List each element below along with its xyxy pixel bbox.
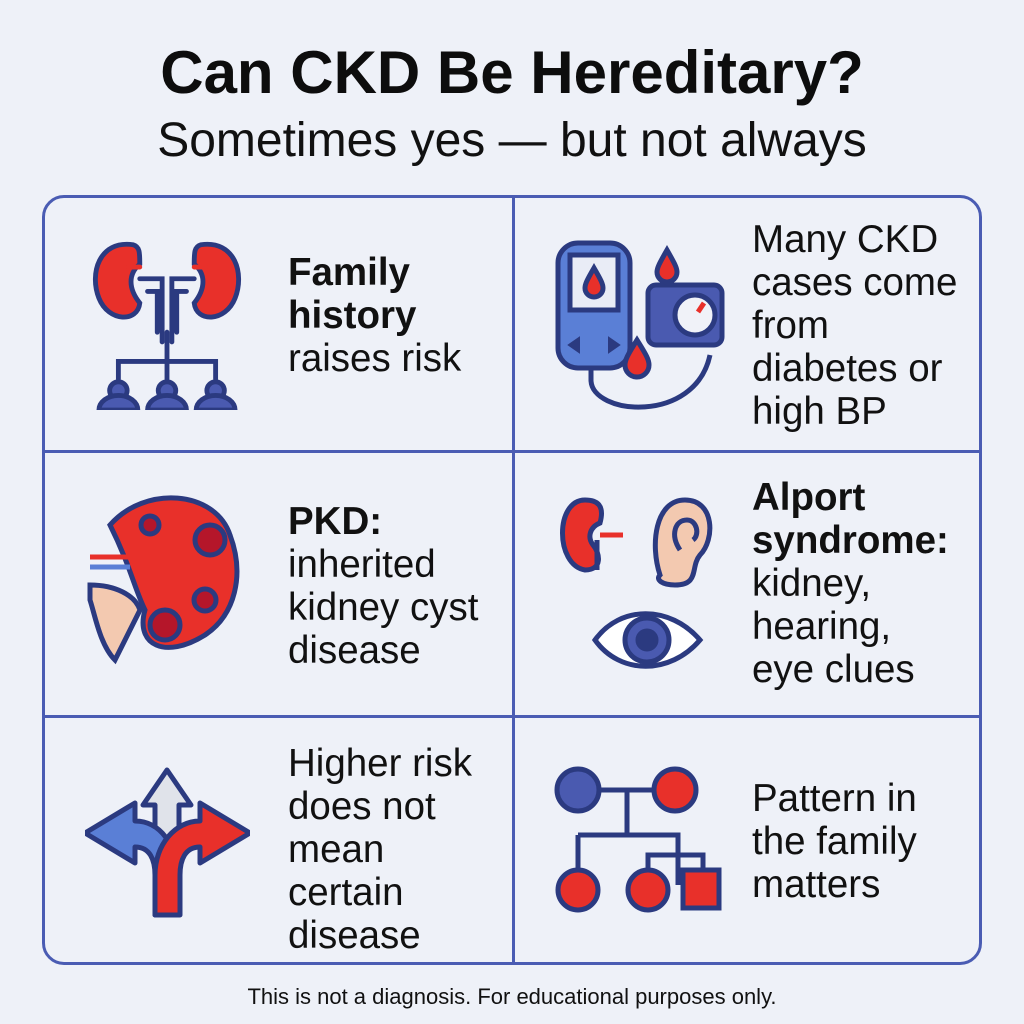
text: PKD: kidney cyst bbox=[288, 586, 478, 629]
icon: kidneys family tree bbox=[92, 242, 242, 410]
text: higher risk: mean bbox=[288, 828, 384, 871]
text: higher risk: certain bbox=[288, 871, 404, 914]
text: family history: history bbox=[288, 294, 416, 337]
text: Alport: kidney, bbox=[752, 562, 871, 605]
text: higher risk: Higher risk bbox=[288, 742, 472, 785]
title: Can CKD Be Hereditary? bbox=[160, 39, 864, 106]
text: family history: Family bbox=[288, 251, 410, 294]
text: PKD: disease bbox=[288, 629, 421, 672]
icon: glucose meter and BP cuff bbox=[556, 240, 724, 410]
text: Alport bbox=[752, 476, 949, 691]
text: PKD: PKD: bbox=[288, 500, 382, 543]
text: diabetes or BP: diabetes or bbox=[752, 347, 942, 390]
text: family history bbox=[288, 251, 462, 380]
text: Alport: hearing, bbox=[752, 605, 891, 648]
text: Alport: eye clues bbox=[752, 648, 915, 691]
text: pattern: matters bbox=[752, 863, 880, 906]
text: PKD bbox=[288, 500, 478, 672]
text: higher risk: disease bbox=[288, 914, 421, 957]
text: pattern: the family bbox=[752, 820, 917, 863]
footer disclaimer: This is not a diagnosis. For educational purposes only. bbox=[247, 984, 777, 1009]
text: pattern bbox=[752, 777, 917, 906]
text: pattern: Pattern in bbox=[752, 777, 917, 820]
icon: polycystic kidney bbox=[88, 495, 240, 664]
text: diabetes or BP: Many CKD bbox=[752, 218, 938, 261]
text: higher risk bbox=[288, 742, 472, 957]
text: higher risk: does not bbox=[288, 785, 436, 828]
text: diabetes or BP: from bbox=[752, 304, 829, 347]
text: family history: raises risk bbox=[288, 337, 461, 380]
text: diabetes or BP bbox=[752, 218, 957, 433]
text: Alport: Alport bbox=[752, 476, 865, 519]
icon: pedigree chart bbox=[554, 766, 722, 912]
text: diabetes or BP: high BP bbox=[752, 390, 887, 433]
icon: kidney ear eye bbox=[560, 498, 712, 669]
subtitle: Sometimes yes — but not always bbox=[157, 114, 867, 167]
text: PKD: inherited bbox=[288, 543, 436, 586]
text: diabetes or BP: cases come bbox=[752, 261, 957, 304]
icon: branching arrows bbox=[85, 768, 250, 918]
panel grid bbox=[42, 195, 982, 965]
text: Alport: syndrome: bbox=[752, 519, 949, 562]
